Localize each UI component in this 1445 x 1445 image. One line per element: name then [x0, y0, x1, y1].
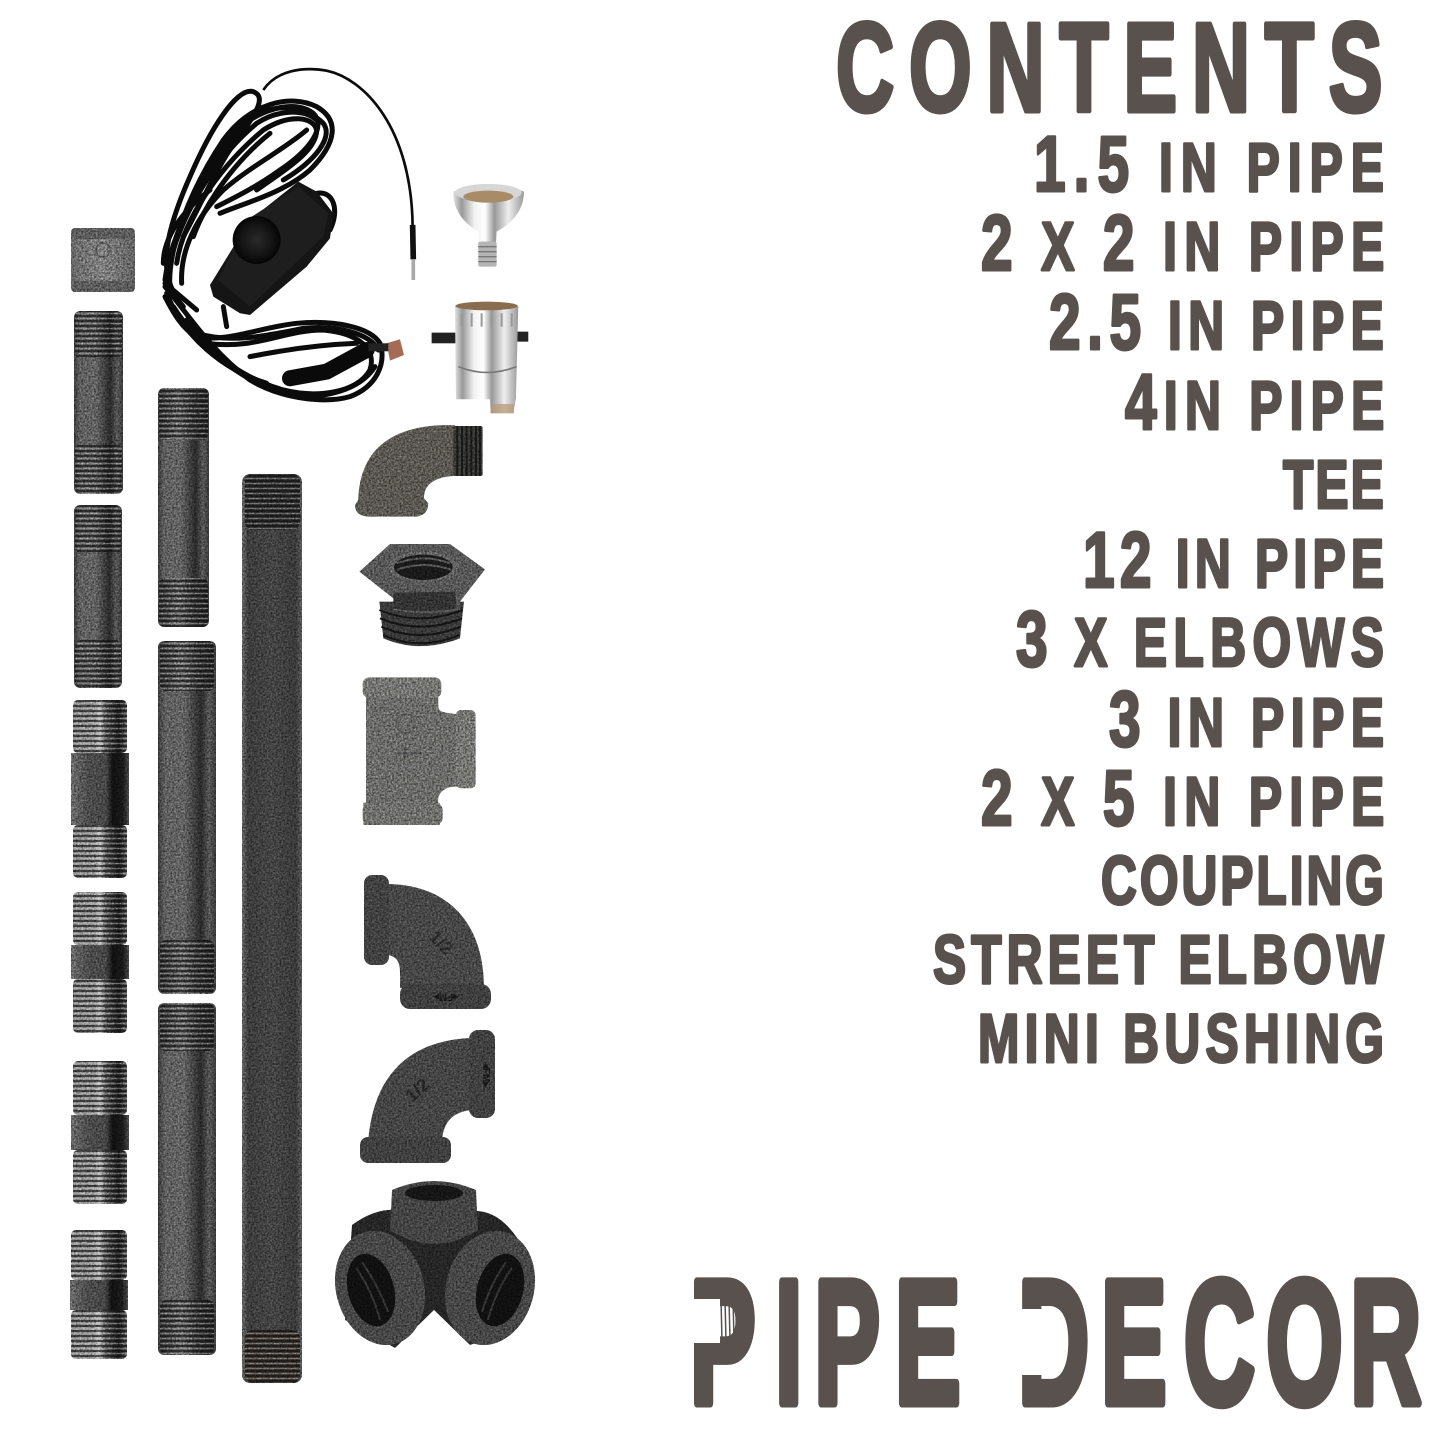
dimmer switch	[210, 182, 333, 315]
item: 1.5 in pipe: 1.5 IN PIPE	[1034, 120, 1384, 208]
logo: pipe decor: PIPE DECOR	[690, 1245, 1421, 1441]
pipe nipple C	[71, 700, 129, 878]
cord loops	[163, 91, 382, 400]
pipe H	[158, 641, 216, 994]
tee fitting	[363, 677, 476, 825]
elbow 1: 1/2	[425, 927, 457, 959]
elbow 2: 1/2	[401, 1074, 433, 1106]
pipe G	[158, 388, 209, 627]
pipe nipple F	[70, 1230, 128, 1359]
product photo: pipes and fittings	[70, 228, 548, 1383]
pipe nipple A	[74, 311, 123, 494]
elbow 2	[360, 1030, 495, 1163]
plug	[290, 339, 404, 378]
item: 12 in pipe: 12 IN PIPE	[1083, 516, 1384, 604]
pipe nipple D	[71, 892, 129, 1033]
long 12 in pipe J	[242, 474, 302, 1383]
lamp cord with dimmer switch	[163, 69, 413, 400]
pipe I	[158, 1003, 216, 1355]
item: 2 x 2 in pipe: 2 X 2 IN PIPE	[981, 199, 1384, 287]
coupling	[71, 228, 135, 292]
contents list	[933, 120, 1384, 1077]
heading: contents: CONTENTS	[836, 0, 1383, 138]
pipe nipple E	[71, 1061, 129, 1204]
item: 2 x 5 in pipe: 2 X 5 IN PIPE	[981, 754, 1384, 842]
elbow 1: ◂FM▸	[433, 991, 459, 1002]
hex bushing	[359, 544, 485, 646]
elbow 2: ◂FM▸	[480, 1062, 491, 1088]
item: 3 in pipe: 3 IN PIPE	[1109, 675, 1384, 763]
item: mini bushing: MINI BUSHING	[978, 1000, 1384, 1077]
street elbow	[355, 425, 483, 517]
item: 2.5 in pipe: 2.5 IN PIPE	[1049, 278, 1384, 366]
lamp socket body	[432, 302, 528, 413]
pipe nipple B	[74, 505, 122, 688]
side outlet tee fitting	[322, 1181, 548, 1355]
item: street elbow: STREET ELBOW	[933, 921, 1384, 998]
single wire lead	[263, 69, 413, 280]
item: 3 x elbows: 3 X ELBOWS	[1016, 595, 1384, 683]
item: tee: TEE	[1283, 446, 1384, 523]
elbow 1	[364, 875, 491, 1009]
lamp socket cap	[453, 184, 524, 267]
item: 4in pipe: 4IN PIPE	[1125, 358, 1384, 446]
item: coupling: COUPLING	[1101, 842, 1384, 919]
